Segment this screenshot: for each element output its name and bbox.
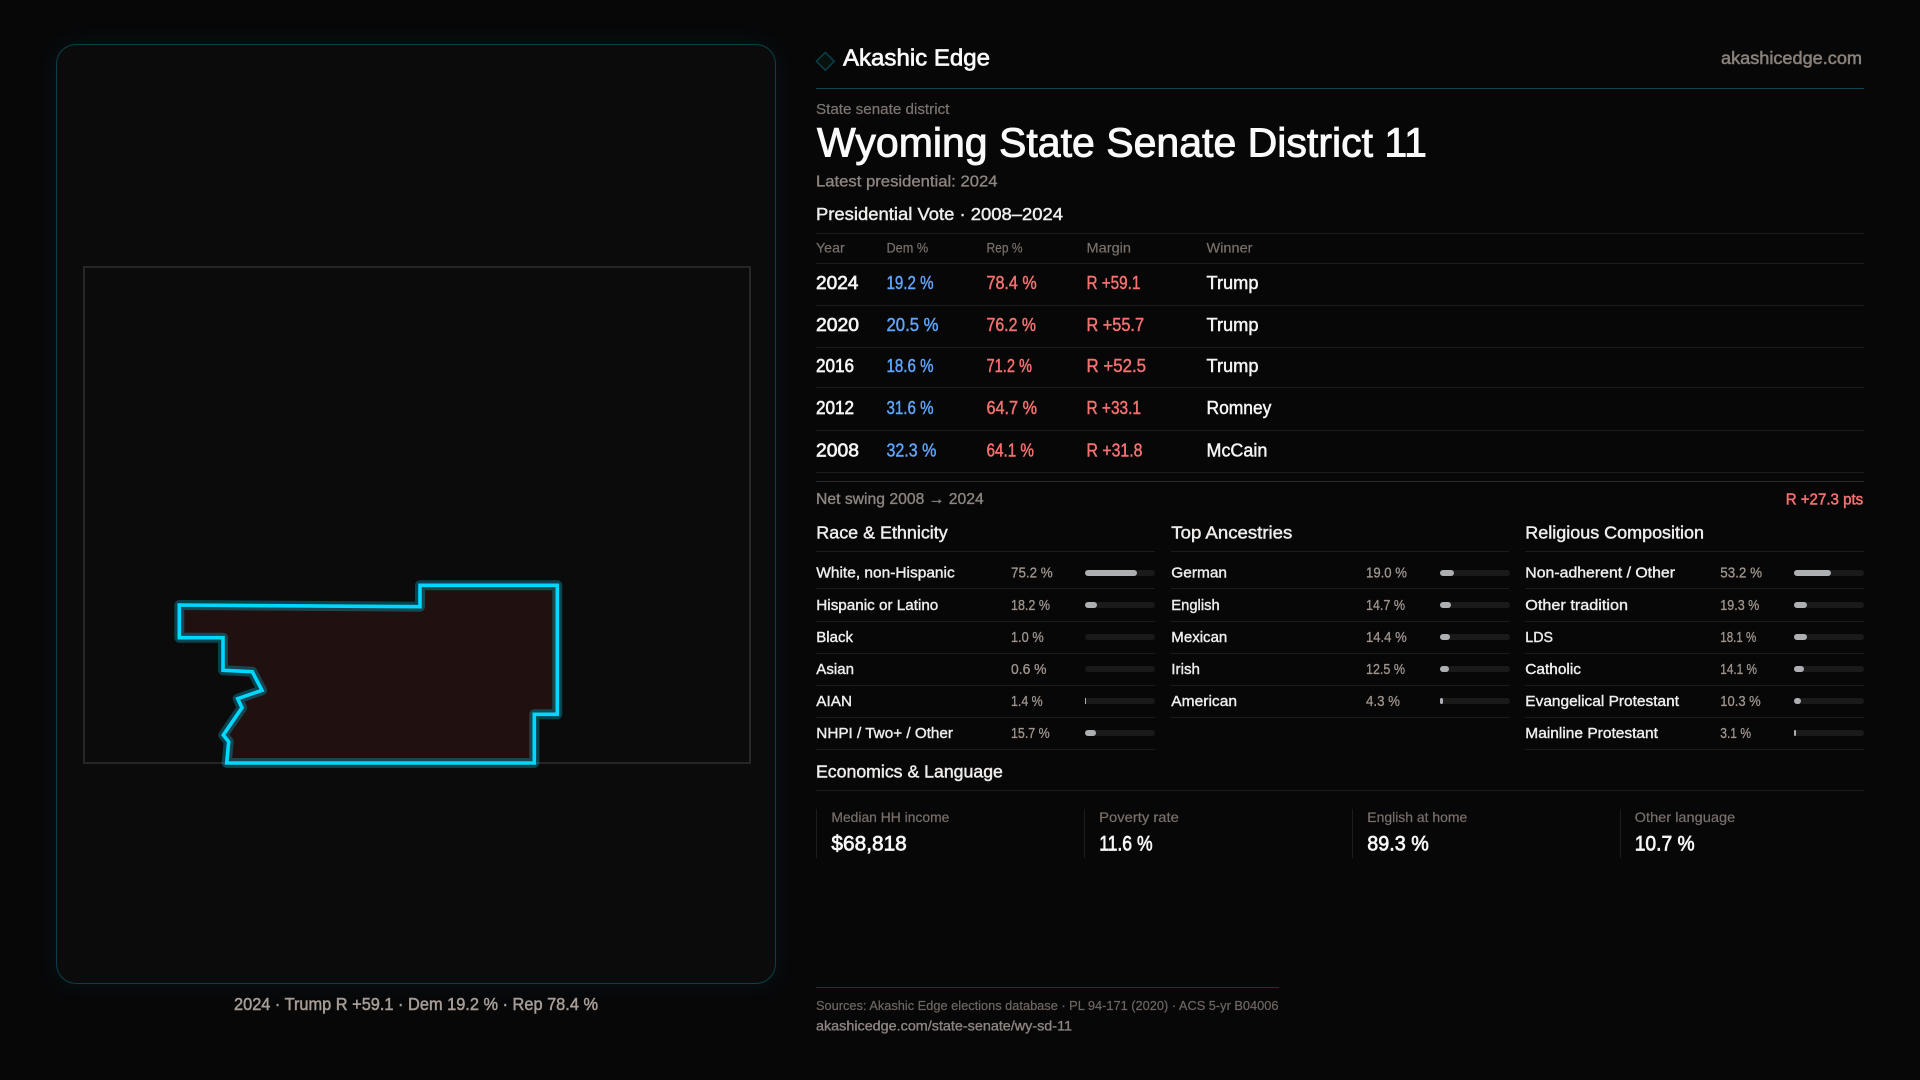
row: non-adherent <box>1525 565 1864 582</box>
heading: Religious Composition <box>1525 522 1704 542</box>
subtitle: Latest presidential: 2024 <box>816 174 998 191</box>
eyebrow: State senate district <box>816 102 949 118</box>
row: black: Black <box>816 630 854 646</box>
row 2024: R +59.1 <box>1086 273 1140 293</box>
row: english: 14.7 % <box>1366 597 1405 614</box>
table header: Margin <box>1086 240 1131 256</box>
row: lds <box>1525 629 1864 646</box>
row: catholic: 14.1 % <box>1720 661 1757 678</box>
row: nhpi <box>816 725 1155 742</box>
row 2012: 2012 <box>816 398 854 418</box>
row 2008: R +31.8 <box>1086 440 1142 460</box>
row: non-adherent: 53.2 % <box>1720 565 1762 582</box>
row 2020: 20.5 % <box>886 315 938 335</box>
row: english <box>1171 597 1510 614</box>
heading: presidential vote: Presidential Vote · 2008–2024 <box>816 204 1063 224</box>
row 2020 <box>816 315 1258 335</box>
row: mainline: 3.1 % <box>1720 725 1751 742</box>
stat: median income: $68,818 <box>831 831 907 856</box>
row 2024: 19.2 % <box>886 273 934 293</box>
row: evangelical: 10.3 % <box>1720 693 1761 710</box>
heading: Top Ancestries <box>1171 522 1292 542</box>
row: black: 1.0 % <box>1011 629 1044 646</box>
table header <box>816 240 1253 256</box>
stat: english at home: English at home <box>1367 809 1467 825</box>
row 2008: 64.1 % <box>986 440 1034 460</box>
title: Wyoming State Senate District 11 <box>817 120 1427 166</box>
row 2008: McCain <box>1206 440 1267 460</box>
stat: poverty rate: 11.6 % <box>1099 831 1153 856</box>
stat: other language <box>1620 809 1735 858</box>
row: mexican <box>1171 629 1510 646</box>
brand name: Akashic Edge <box>843 45 990 71</box>
row 2008 <box>816 440 1267 460</box>
row: mexican: Mexican <box>1171 630 1227 646</box>
row: catholic: Catholic <box>1525 662 1581 678</box>
stat: other language: Other language <box>1635 809 1735 825</box>
row 2024: 78.4 % <box>986 273 1037 293</box>
row: other tradition <box>1525 597 1864 614</box>
panel: race and ethnicity <box>816 522 1155 750</box>
row: american: 4.3 % <box>1366 693 1400 710</box>
row: nhpi: NHPI / Two+ / Other <box>816 726 953 742</box>
row 2016: 71.2 % <box>986 356 1032 376</box>
row 2008: 2008 <box>816 440 859 460</box>
row 2012 <box>816 398 1271 418</box>
row 2016: 2016 <box>816 356 854 376</box>
row 2016: 18.6 % <box>886 356 934 376</box>
heading: Economics & Language <box>816 761 1003 781</box>
map caption: 2024 · Trump R +59.1 · Dem 19.2 % · Rep 78.4 % <box>234 994 598 1014</box>
row: evangelical <box>1525 693 1864 710</box>
net swing <box>816 491 1863 508</box>
row 2020: R +55.7 <box>1086 315 1144 335</box>
table header: Winner <box>1206 240 1253 256</box>
row: asian: Asian <box>816 662 854 678</box>
row: aian: AIAN <box>816 694 852 710</box>
row: evangelical: Evangelical Protestant <box>1525 694 1679 710</box>
row: hispanic: 18.2 % <box>1011 597 1050 614</box>
row: other tradition: Other tradition <box>1525 598 1628 614</box>
icon: diamond logo <box>816 52 834 70</box>
sources: Sources: Akashic Edge elections database · PL 94-171 (2020) · ACS 5-yr B04006 <box>816 998 1278 1013</box>
stat: english at home: 89.3 % <box>1367 831 1429 856</box>
row 2020: 2020 <box>816 315 859 335</box>
stat: poverty rate <box>1084 809 1179 858</box>
stat: poverty rate: Poverty rate <box>1099 809 1179 825</box>
row 2012: R +33.1 <box>1086 398 1141 418</box>
panel: religious composition <box>1525 522 1864 750</box>
stat: median income <box>816 809 950 858</box>
heading: Race & Ethnicity <box>816 522 948 542</box>
row 2020: 76.2 % <box>986 315 1036 335</box>
row 2008: 32.3 % <box>886 440 936 460</box>
row: white: 75.2 % <box>1011 565 1053 582</box>
row: hispanic: Hispanic or Latino <box>816 598 938 614</box>
row: lds: 18.1 % <box>1720 629 1756 646</box>
row: aian <box>816 693 1155 710</box>
row: german: 19.0 % <box>1366 565 1407 582</box>
row 2016: R +52.5 <box>1086 356 1146 376</box>
row: catholic <box>1525 661 1864 678</box>
header <box>816 45 1862 71</box>
row: american: American <box>1171 694 1237 710</box>
row: mainline: Mainline Protestant <box>1525 726 1658 742</box>
row: irish: 12.5 % <box>1366 661 1405 678</box>
row: white: White, non-Hispanic <box>816 566 955 582</box>
row 2012: 64.7 % <box>986 398 1037 418</box>
district shape <box>179 585 557 763</box>
row 2024: Trump <box>1206 273 1258 293</box>
row: mainline <box>1525 725 1864 742</box>
row 2016 <box>816 356 1258 376</box>
stat: other language: 10.7 % <box>1635 831 1695 856</box>
stat: median income: Median HH income <box>831 809 950 825</box>
row: irish <box>1171 661 1510 678</box>
page url: akashicedge.com/state-senate/wy-sd-11 <box>816 1018 1072 1034</box>
row: asian: 0.6 % <box>1011 661 1046 678</box>
table header: Rep % <box>986 240 1022 256</box>
row: non-adherent: Non-adherent / Other <box>1525 566 1675 582</box>
panel: district map <box>56 44 776 984</box>
site url: akashicedge.com <box>1721 48 1862 68</box>
panel: top ancestries <box>1171 522 1510 718</box>
state outline <box>84 267 750 763</box>
row 2020: Trump <box>1206 315 1258 335</box>
row: german <box>1171 565 1510 582</box>
row: asian <box>816 661 1155 678</box>
row: german: German <box>1171 566 1227 582</box>
row: black <box>816 629 1155 646</box>
row 2016: Trump <box>1206 356 1258 376</box>
stat: english at home <box>1352 809 1467 858</box>
row 2012: 31.6 % <box>886 398 934 418</box>
net swing: R +27.3 pts <box>1786 492 1863 508</box>
row: hispanic <box>816 597 1155 614</box>
row 2024: 2024 <box>816 273 858 293</box>
row: aian: 1.4 % <box>1011 693 1043 710</box>
row: american <box>1171 693 1510 710</box>
row: other tradition: 19.3 % <box>1720 597 1759 614</box>
row 2024 <box>816 273 1258 293</box>
row: mexican: 14.4 % <box>1366 629 1407 646</box>
row 2012: Romney <box>1206 398 1271 418</box>
row: irish: Irish <box>1171 662 1200 678</box>
footer <box>816 988 1279 1034</box>
row: lds: LDS <box>1525 630 1553 646</box>
net swing: Net swing 2008 → 2024 <box>816 491 984 508</box>
table header: Dem % <box>886 240 928 256</box>
table: presidential vote <box>816 234 1864 472</box>
panel: economics and language <box>816 761 1864 858</box>
row: nhpi: 15.7 % <box>1011 725 1050 742</box>
row: white <box>816 565 1155 582</box>
row: english: English <box>1171 598 1220 614</box>
table header: Year <box>816 240 845 256</box>
